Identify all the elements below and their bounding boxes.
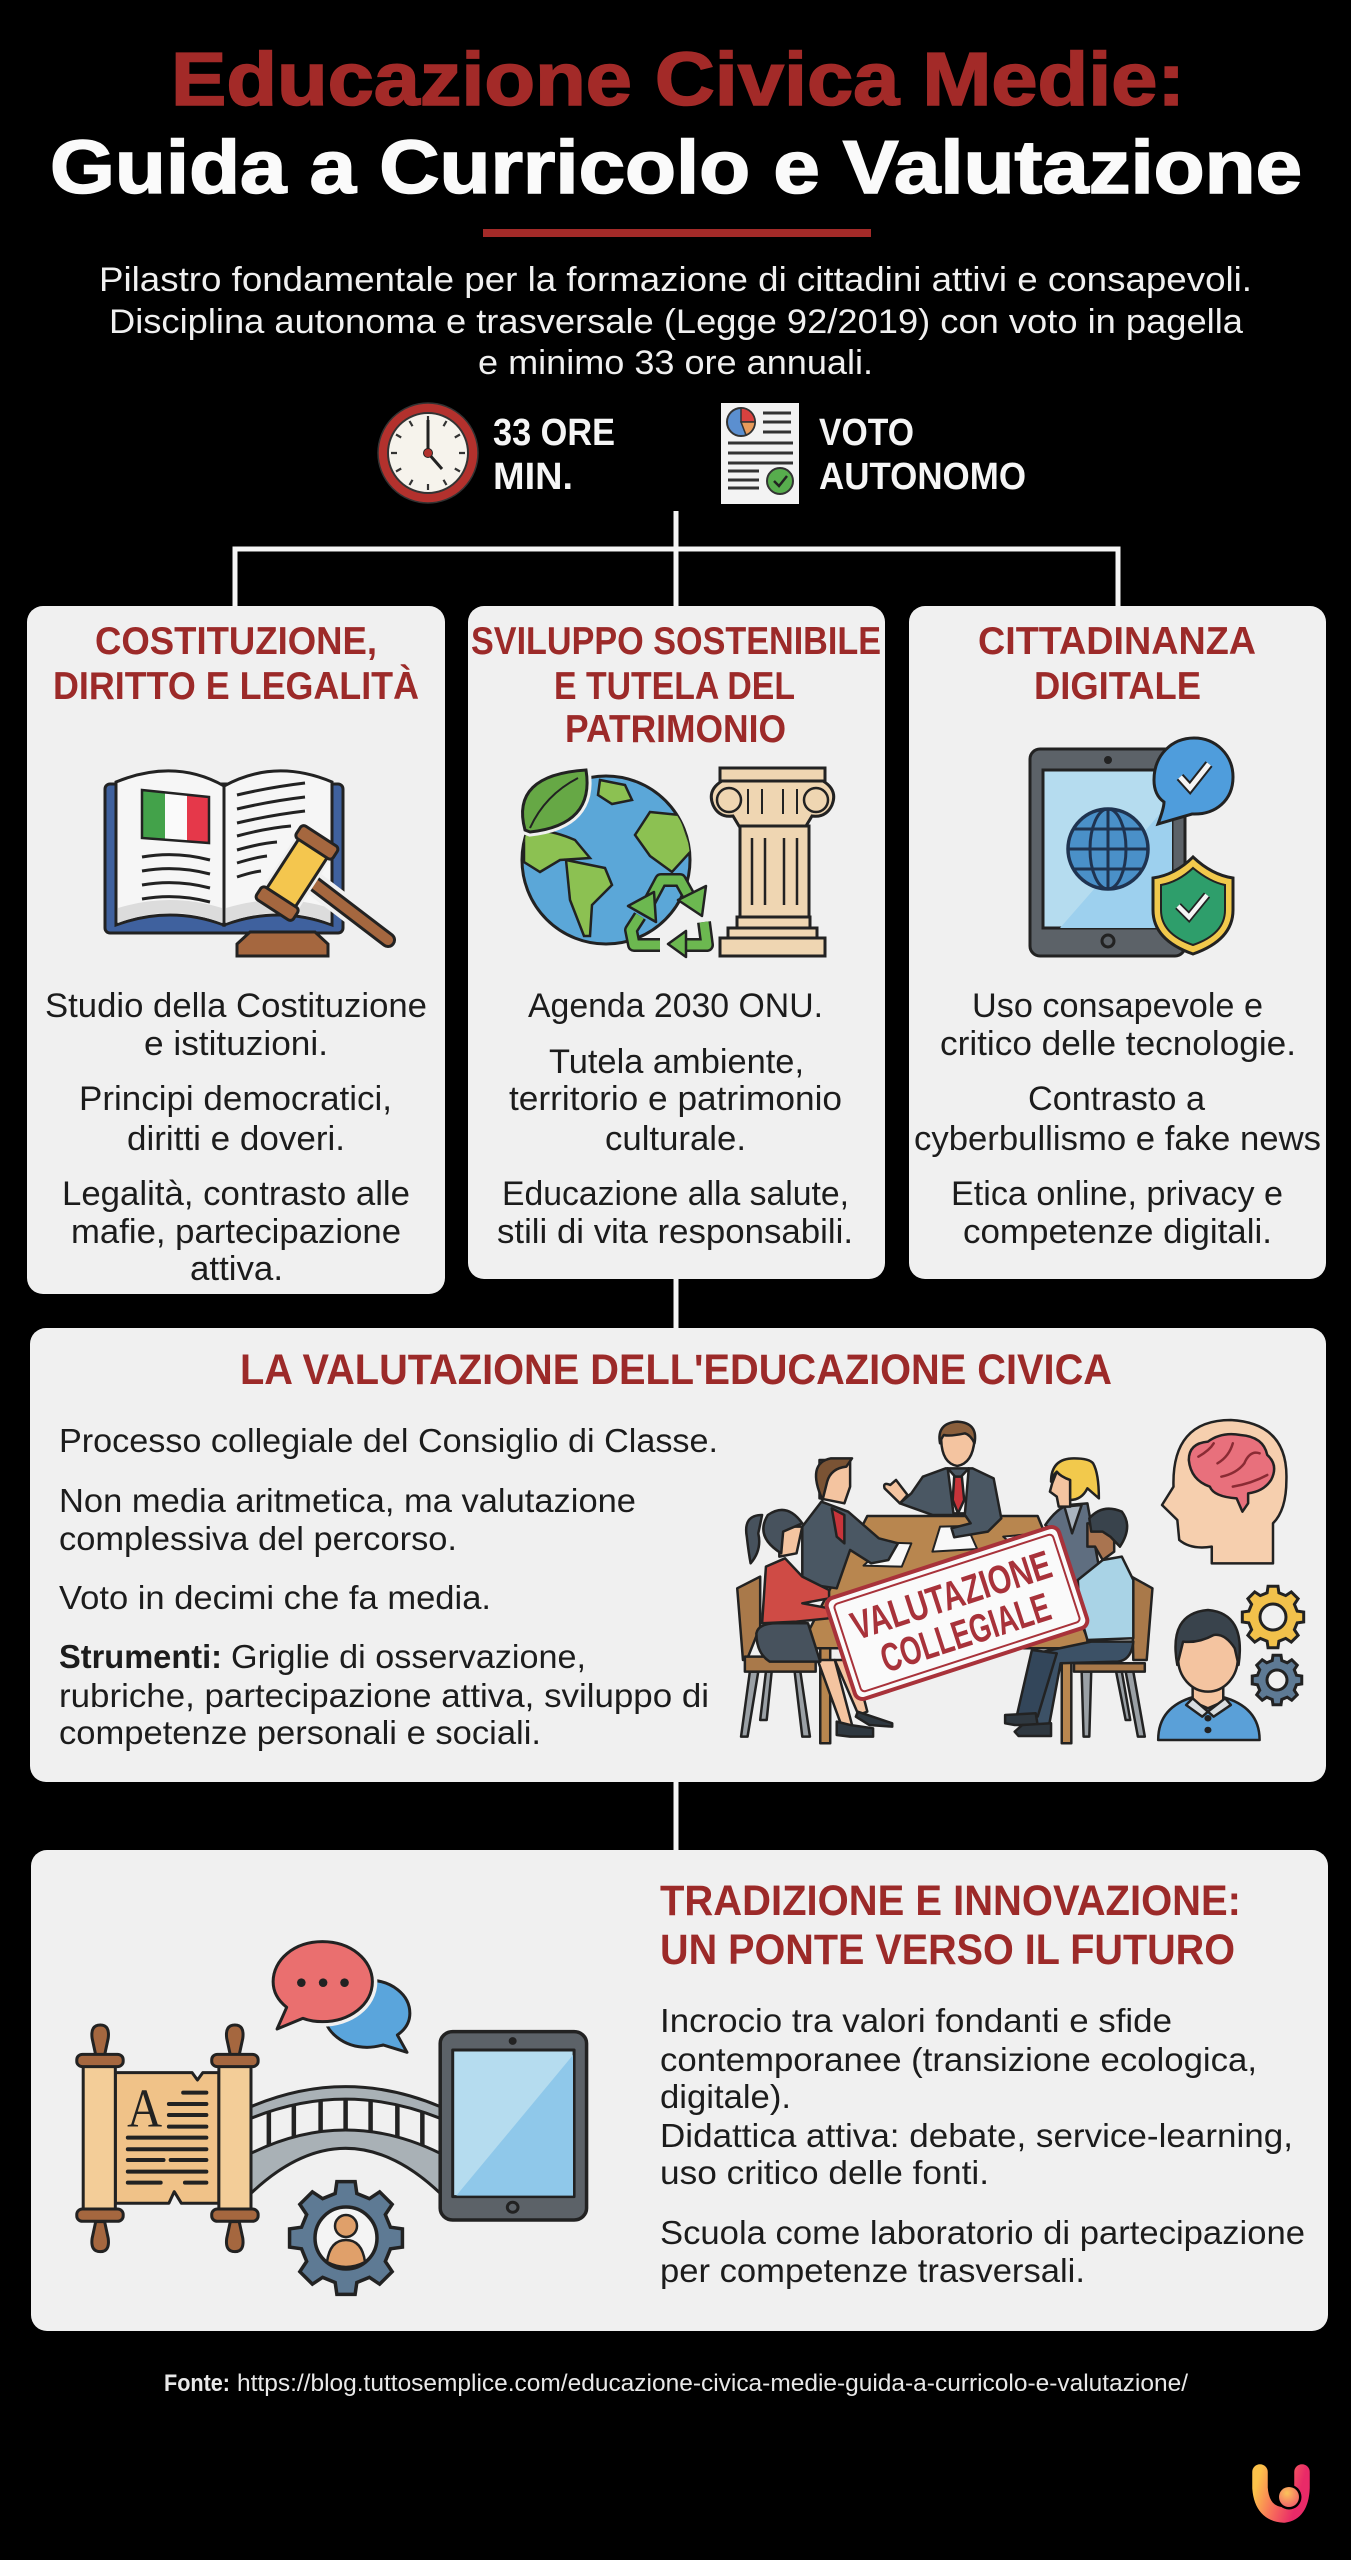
table — [805, 1516, 1087, 1743]
body text: diritti e doveri. — [127, 1120, 345, 1158]
body text: Contrasto a — [1028, 1080, 1206, 1118]
body text: mafie, partecipazione — [71, 1213, 401, 1251]
subtitle text: e minimo 33 ore annuali. — [478, 344, 873, 382]
body text — [497, 987, 853, 1251]
panel: sviluppo sostenibile — [468, 606, 885, 1279]
source line: Fonte: — [164, 2370, 230, 2397]
body text: Processo collegiale del Consiglio di Classe. — [59, 1423, 718, 1460]
heading — [53, 620, 419, 708]
body text: Incrocio tra valori fondanti e sfide — [660, 2003, 1172, 2040]
body text: complessiva del percorso. — [59, 1521, 457, 1558]
heading: E TUTELA DEL — [554, 665, 795, 708]
stamp: valutazione collegiale: VALUTAZIONE — [846, 1543, 1057, 1649]
icon: book and gavel — [105, 771, 388, 956]
title — [50, 37, 1302, 209]
label: voto autonomo — [819, 412, 1026, 498]
body text: competenze personali e sociali. — [59, 1715, 541, 1752]
illustration: scroll, bridge, tablet, speech bubbles — [77, 1942, 587, 2252]
icon: gear with person — [290, 2182, 402, 2294]
red speech bubble — [273, 1942, 372, 2029]
illustration: teachers meeting around table — [737, 1420, 1286, 1743]
body text: cyberbullismo e fake news — [914, 1120, 1321, 1158]
brain head — [1162, 1420, 1286, 1563]
body text — [914, 987, 1321, 1251]
body text: Educazione alla salute, — [502, 1175, 849, 1213]
body text: Non media aritmetica, ma valutazione — [59, 1483, 636, 1520]
body text: Scuola come laboratorio di partecipazione — [660, 2215, 1305, 2252]
right man — [1005, 1509, 1133, 1736]
panel: costituzione — [27, 606, 445, 1294]
heading — [471, 620, 881, 751]
blue speech bubble — [324, 1980, 410, 2052]
body text: Strumenti: — [59, 1639, 222, 1676]
heading: COSTITUZIONE, — [95, 620, 377, 663]
source line: https://blog.tuttosemplice.com/educazione-civica-medie-guida-a-curricolo-e-valutazione/ — [237, 2370, 1188, 2397]
body text: Didattica attiva: debate, service-learning, — [660, 2118, 1293, 2155]
person with gears — [1158, 1610, 1260, 1740]
label: 33 ore min: 33 ORE — [493, 412, 615, 454]
bridge — [251, 2087, 440, 2193]
icon: clock — [378, 403, 478, 503]
papers — [864, 1526, 1043, 1567]
blonde teacher — [1045, 1458, 1099, 1582]
body text: Uso consapevole e — [972, 987, 1263, 1025]
body text: per competenze trasversali. — [660, 2253, 1085, 2290]
heading: CITTADINANZA — [978, 620, 1256, 663]
body text: rubriche, partecipazione attiva, sviluppo di — [59, 1678, 709, 1715]
logo — [1260, 2472, 1302, 2515]
red speech bubble halo — [273, 1942, 372, 2029]
tablet — [440, 2032, 587, 2220]
body text: Griglie di osservazione, — [231, 1639, 586, 1676]
connector: cards to panels — [674, 1279, 678, 1850]
panel: tradizione e innovazione — [31, 1850, 1328, 2331]
body text: uso critico delle fonti. — [660, 2155, 989, 2192]
body text: critico delle tecnologie. — [940, 1025, 1296, 1063]
body text: Tutela ambiente, — [549, 1043, 804, 1081]
heading: UN PONTE VERSO IL FUTURO — [660, 1926, 1235, 1974]
body text: Principi democratici, — [79, 1080, 392, 1118]
title: Educazione Civica Medie: — [171, 37, 1185, 121]
heading: LA VALUTAZIONE DELL'EDUCAZIONE CIVICA — [240, 1346, 1112, 1394]
body text: contemporanee (transizione ecologica, — [660, 2042, 1257, 2079]
left woman — [746, 1510, 892, 1737]
heading: DIRITTO E LEGALITÀ — [53, 664, 419, 708]
right chair — [1074, 1577, 1152, 1737]
body text: e istituzioni. — [144, 1025, 328, 1063]
icon: yellow gear — [1242, 1586, 1304, 1648]
stamp: valutazione collegiale — [825, 1525, 1089, 1701]
label: voto autonomo: VOTO — [819, 412, 914, 454]
stamp: valutazione collegiale: COLLEGIALE — [875, 1585, 1056, 1681]
panel: la valutazione — [30, 1328, 1326, 1782]
icon: blue gear — [1252, 1655, 1302, 1705]
title: Guida a Curricolo e Valutazione — [50, 125, 1302, 209]
heading — [660, 1877, 1241, 1974]
icon: tablet, globe, chat check, shield — [1030, 738, 1233, 956]
body text: Legalità, contrasto alle — [62, 1175, 410, 1213]
body text — [45, 987, 427, 1288]
label: voto autonomo: AUTONOMO — [819, 456, 1026, 498]
title underline — [483, 229, 871, 237]
heading: DIGITALE — [1034, 665, 1201, 708]
left teacher — [802, 1458, 898, 1588]
body text: Etica online, privacy e — [951, 1175, 1283, 1213]
icon: recycling arrows — [625, 871, 711, 957]
body text — [660, 2003, 1305, 2290]
subtitle text — [99, 261, 1252, 382]
body text — [59, 1423, 718, 1752]
body text: attiva. — [190, 1250, 283, 1288]
body text: culturale. — [605, 1120, 746, 1158]
body text: Studio della Costituzione — [45, 987, 427, 1025]
body text: territorio e patrimonio — [509, 1080, 842, 1118]
panel: cittadinanza digitale — [909, 606, 1326, 1279]
parchment scroll — [77, 2025, 258, 2252]
body text: digitale). — [660, 2079, 791, 2116]
body text: stili di vita responsabili. — [497, 1213, 853, 1251]
icon: globe, leaf — [522, 770, 692, 944]
label: 33 ore min — [493, 412, 615, 498]
connector: header to cards — [235, 511, 1118, 606]
centre teacher — [884, 1422, 1001, 1537]
body text: competenze digitali. — [963, 1213, 1272, 1251]
left chair — [737, 1577, 816, 1737]
heading: SVILUPPO SOSTENIBILE — [471, 620, 881, 663]
parchment scroll: A — [127, 2078, 162, 2139]
heading: TRADIZIONE E INNOVAZIONE: — [660, 1877, 1241, 1925]
icon: report document — [721, 403, 799, 504]
subtitle text: Disciplina autonoma e trasversale (Legge 92/2019) con voto in pagella — [109, 303, 1243, 341]
body text: Voto in decimi che fa media. — [59, 1580, 491, 1617]
subtitle text: Pilastro fondamentale per la formazione di cittadini attivi e consapevoli. — [99, 261, 1252, 299]
heading: PATRIMONIO — [565, 708, 786, 751]
heading — [978, 620, 1256, 708]
body text: Agenda 2030 ONU. — [528, 987, 823, 1025]
label: 33 ore min: MIN. — [493, 456, 573, 498]
dots — [297, 1978, 349, 1987]
icon: classical column — [711, 768, 834, 956]
